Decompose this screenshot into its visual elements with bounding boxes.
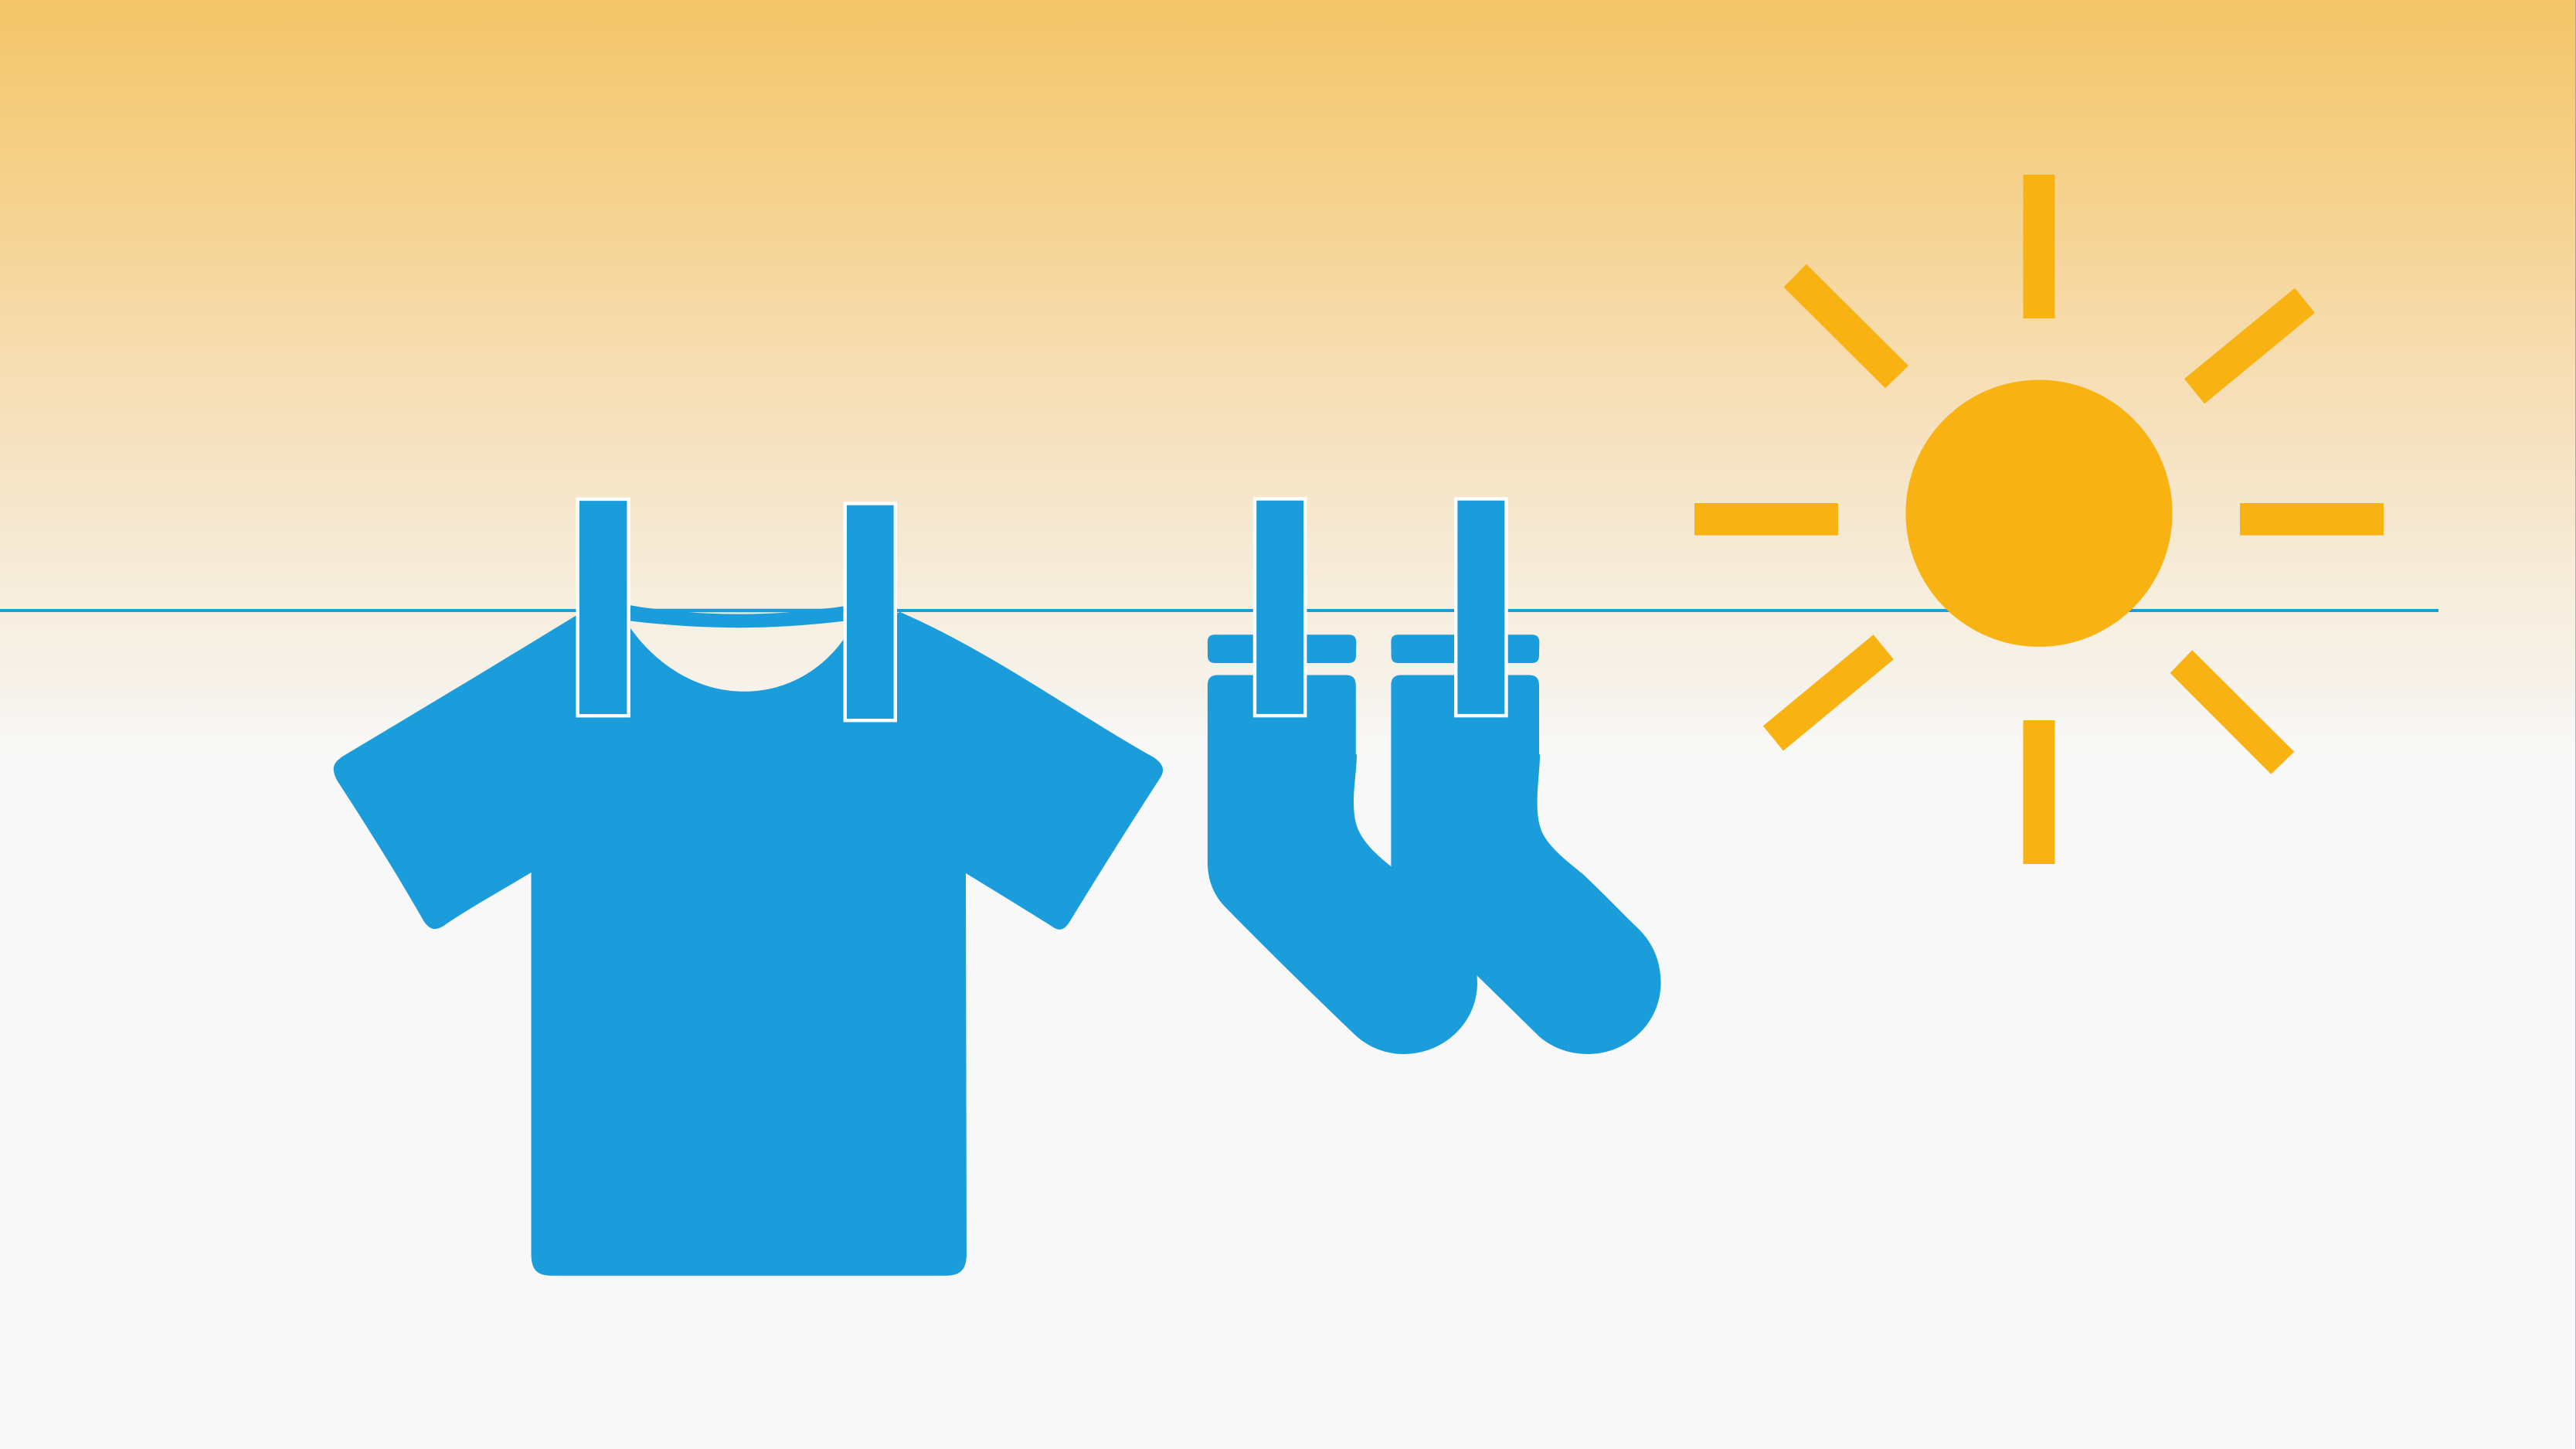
sun ray: bottom right: [2170, 650, 2294, 774]
peg: shirt left: [578, 499, 629, 716]
clothes pegs: [578, 499, 1507, 720]
right sock cuff: [1391, 634, 1539, 663]
sun ray: left: [1694, 503, 1838, 536]
t-shirt collar band: [630, 605, 844, 628]
peg: shirt right: [845, 504, 895, 720]
t-shirt: [334, 605, 1163, 1276]
sun ray: top: [2023, 175, 2055, 318]
t-shirt body: [334, 612, 1163, 1276]
sun ray: right: [2240, 503, 2384, 536]
right sock: [1391, 675, 1661, 1054]
left sock cuff: [1208, 634, 1356, 663]
t-shirt collar sliver highlight: [688, 612, 790, 614]
sun ray: bottom left: [1763, 634, 1894, 751]
sun ray: top left: [1784, 264, 1908, 388]
icon: sun: [1694, 175, 2384, 864]
socks: [1208, 634, 1661, 1054]
peg: left sock: [1255, 499, 1305, 716]
clothesline: [0, 609, 2438, 612]
left sock: [1208, 675, 1477, 1054]
sun ray: bottom: [2023, 720, 2055, 864]
peg: right sock: [1456, 499, 1507, 716]
right edge hairline: [2575, 0, 2576, 1449]
sun ray: top right: [2184, 288, 2315, 403]
sun disc: [1905, 380, 2173, 647]
